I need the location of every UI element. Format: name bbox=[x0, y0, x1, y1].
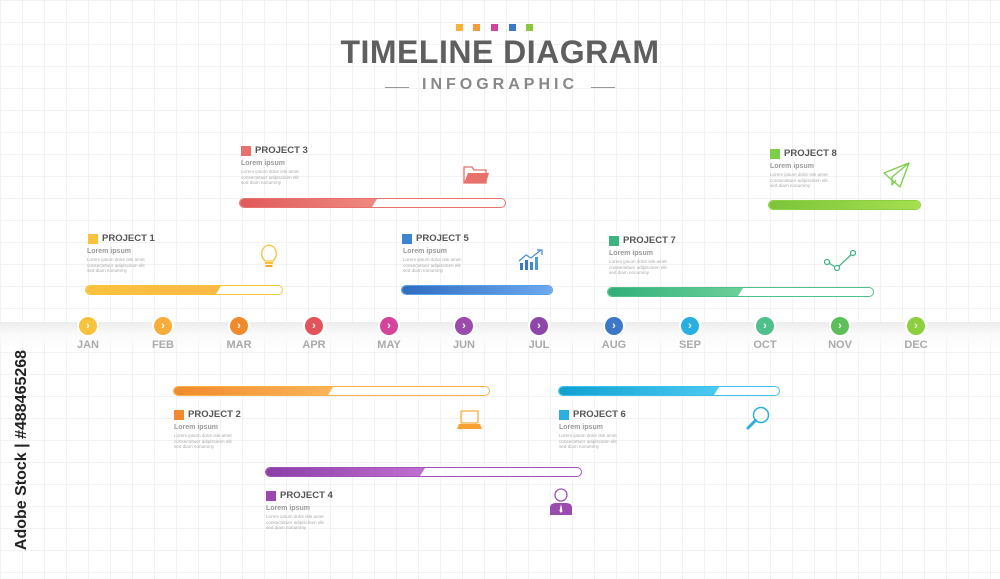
panel: project 3: consectetuer adipiscinen elit bbox=[241, 175, 299, 180]
text: › bbox=[838, 320, 842, 332]
title: TIMELINE DIAGRAM bbox=[340, 34, 660, 70]
panel: project 4: Lorem ipsum dolor isle amet bbox=[266, 514, 324, 519]
text: MAR bbox=[226, 339, 252, 351]
text: › bbox=[688, 320, 692, 332]
panel: project 8: Lorem ipsum bbox=[770, 163, 814, 170]
panel: project 5: sed diam nonummy bbox=[403, 268, 443, 273]
panel: project 3: Lorem ipsum dolor isle amet bbox=[241, 169, 299, 174]
panel: project 7: PROJECT 7 bbox=[623, 235, 676, 246]
panel: project 6: sed diam nonummy bbox=[559, 444, 599, 449]
panel: project 5: Lorem ipsum dolor isle amet bbox=[403, 257, 461, 262]
text: NOV bbox=[828, 339, 852, 351]
panel: project 5: consectetuer adipiscinen elit bbox=[403, 263, 461, 268]
text: SEP bbox=[679, 339, 701, 351]
panel: project 7: sed diam nonummy bbox=[609, 270, 649, 275]
text: DEC bbox=[904, 339, 928, 351]
panel: project 7: consectetuer adipiscinen elit bbox=[609, 265, 667, 270]
panel: project 3 bbox=[239, 145, 506, 208]
text: › bbox=[86, 320, 90, 332]
icon: magnifier bbox=[746, 406, 770, 430]
panel: project 1 bbox=[85, 233, 283, 295]
text: › bbox=[462, 320, 466, 332]
text: › bbox=[763, 320, 767, 332]
panel: project 1: Lorem ipsum bbox=[87, 248, 131, 255]
text: MAY bbox=[377, 339, 401, 351]
panel: project 2 bbox=[173, 386, 490, 449]
panel: project 1: PROJECT 1 bbox=[102, 233, 155, 244]
text: › bbox=[161, 320, 165, 332]
text: AUG bbox=[602, 339, 626, 351]
text: › bbox=[612, 320, 616, 332]
text: › bbox=[914, 320, 918, 332]
icon: chart bbox=[518, 249, 543, 270]
text: JAN bbox=[77, 339, 99, 351]
panel: project 8: PROJECT 8 bbox=[784, 148, 837, 159]
panel: project 2: PROJECT 2 bbox=[188, 409, 241, 420]
timeline months bbox=[70, 315, 940, 355]
panel: project 3: PROJECT 3 bbox=[255, 145, 308, 156]
icon: laptop bbox=[457, 410, 482, 429]
panel: project 4: sed diam nonummy bbox=[266, 525, 306, 530]
icon: person bbox=[550, 488, 572, 515]
panel: project 4: Lorem ipsum bbox=[266, 505, 310, 512]
text: OCT bbox=[753, 339, 777, 351]
panel: project 4 bbox=[265, 467, 582, 530]
panel: project 4: PROJECT 4 bbox=[280, 490, 333, 501]
panel: project 7: Lorem ipsum bbox=[609, 250, 653, 257]
icon: bulb bbox=[261, 244, 277, 267]
text: APR bbox=[302, 339, 326, 351]
text: JUL bbox=[529, 339, 549, 351]
panel: project 6: PROJECT 6 bbox=[573, 409, 626, 420]
panel: project 6: Lorem ipsum bbox=[559, 424, 603, 431]
panel: project 7 bbox=[607, 235, 874, 297]
text: › bbox=[312, 320, 316, 332]
panel: project 1: Lorem ipsum dolor isle amet bbox=[87, 257, 145, 262]
watermark: adobe stock id: Adobe Stock | #488465268 bbox=[13, 350, 30, 550]
icon: paper plane bbox=[883, 162, 910, 188]
panel: project 1: sed diam nonummy bbox=[87, 268, 127, 273]
panel: project 8: consectetuer adipiscinen elit bbox=[770, 178, 828, 183]
text: › bbox=[387, 320, 391, 332]
timeline band bbox=[0, 322, 1000, 352]
text: FEB bbox=[152, 339, 174, 351]
panel: project 5 bbox=[401, 233, 553, 295]
panel: project 8: sed diam nonummy bbox=[770, 183, 810, 188]
panel: project 3: Lorem ipsum bbox=[241, 160, 285, 167]
panel: project 6: Lorem ipsum dolor isle amet bbox=[559, 433, 617, 438]
text: › bbox=[237, 320, 241, 332]
panel: project 3: sed diam nonummy bbox=[241, 180, 281, 185]
panel: project 2: sed diam nonummy bbox=[174, 444, 214, 449]
panel: project 1: consectetuer adipiscinen elit bbox=[87, 263, 145, 268]
subtitle: INFOGRAPHIC bbox=[422, 76, 578, 93]
panel: project 5: Lorem ipsum bbox=[403, 248, 447, 255]
panel: project 6 bbox=[558, 386, 780, 449]
panel: project 6: consectetuer adipiscinen elit bbox=[559, 439, 617, 444]
panel: project 2: consectetuer adipiscinen elit bbox=[174, 439, 232, 444]
panel: project 5: PROJECT 5 bbox=[416, 233, 469, 244]
text: JUN bbox=[453, 339, 475, 351]
panel: project 8: Lorem ipsum dolor isle amet bbox=[770, 172, 828, 177]
icon: folder bbox=[463, 166, 489, 184]
panel: project 8 bbox=[768, 148, 921, 210]
panel: project 2: Lorem ipsum bbox=[174, 424, 218, 431]
color squares bbox=[456, 24, 533, 31]
panel: project 2: Lorem ipsum dolor isle amet bbox=[174, 433, 232, 438]
icon: graph bbox=[824, 250, 856, 272]
text: › bbox=[537, 320, 541, 332]
panel: project 4: consectetuer adipiscinen elit bbox=[266, 520, 324, 525]
panel: project 7: Lorem ipsum dolor isle amet bbox=[609, 259, 667, 264]
